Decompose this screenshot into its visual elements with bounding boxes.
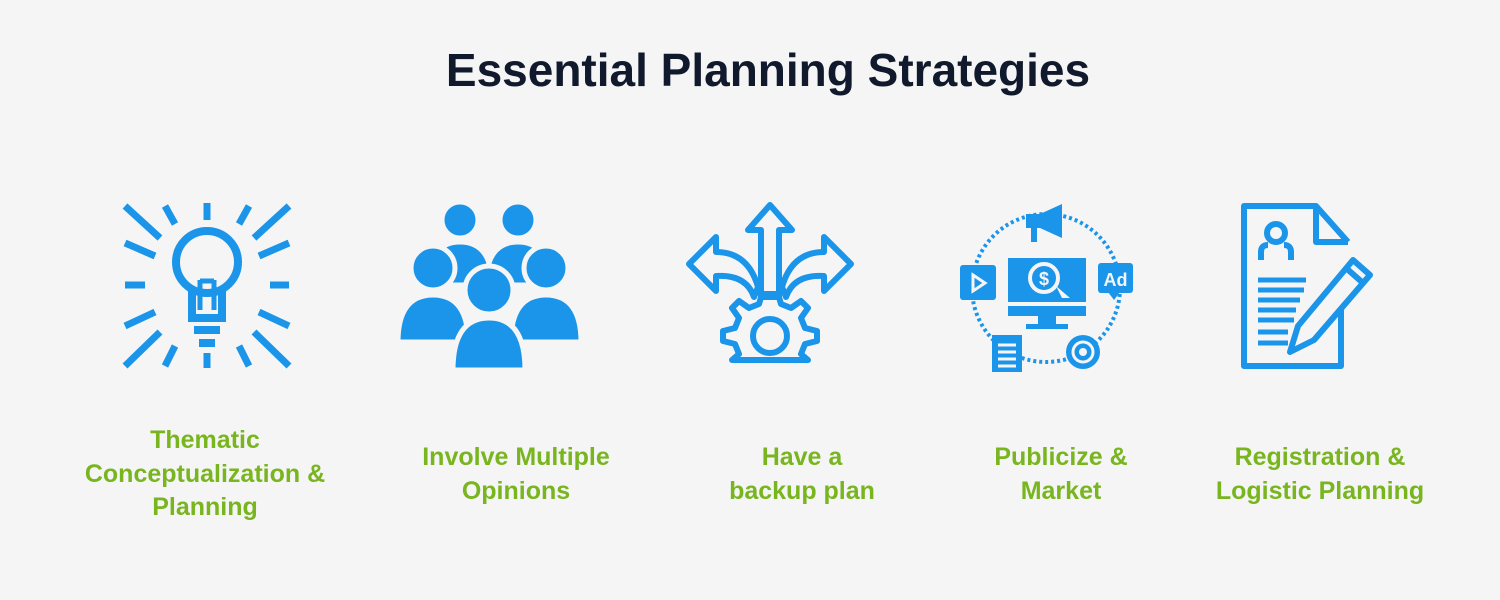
icon: registration form	[1241, 203, 1373, 369]
label: registration: Logistic Planning	[1216, 476, 1424, 504]
label: registration: Registration &	[1235, 443, 1405, 471]
icon: marketing cycle: Ad	[1104, 270, 1128, 290]
icon: people group	[400, 204, 578, 368]
label: opinions: Opinions	[462, 476, 570, 504]
label: opinions: Involve Multiple	[422, 443, 610, 471]
icon: marketing cycle: $	[1039, 269, 1049, 289]
label: backup	[729, 443, 875, 504]
label: thematic: Planning	[152, 493, 258, 521]
icon: marketing cycle	[960, 204, 1133, 372]
icon: gear with arrows	[686, 202, 854, 363]
label: backup: Have a	[762, 443, 842, 471]
label: thematic: Thematic	[150, 426, 260, 454]
title: Essential Planning Strategies	[446, 44, 1090, 96]
label: publicize: Publicize &	[994, 443, 1128, 471]
label: registration	[1216, 443, 1424, 504]
label: opinions	[422, 443, 610, 504]
label: backup: backup plan	[729, 476, 875, 504]
label: publicize	[994, 443, 1128, 504]
label: publicize: Market	[1021, 476, 1101, 504]
icon: light bulb	[122, 203, 292, 368]
label: thematic: Conceptualization &	[85, 460, 325, 488]
label: thematic	[85, 426, 325, 521]
